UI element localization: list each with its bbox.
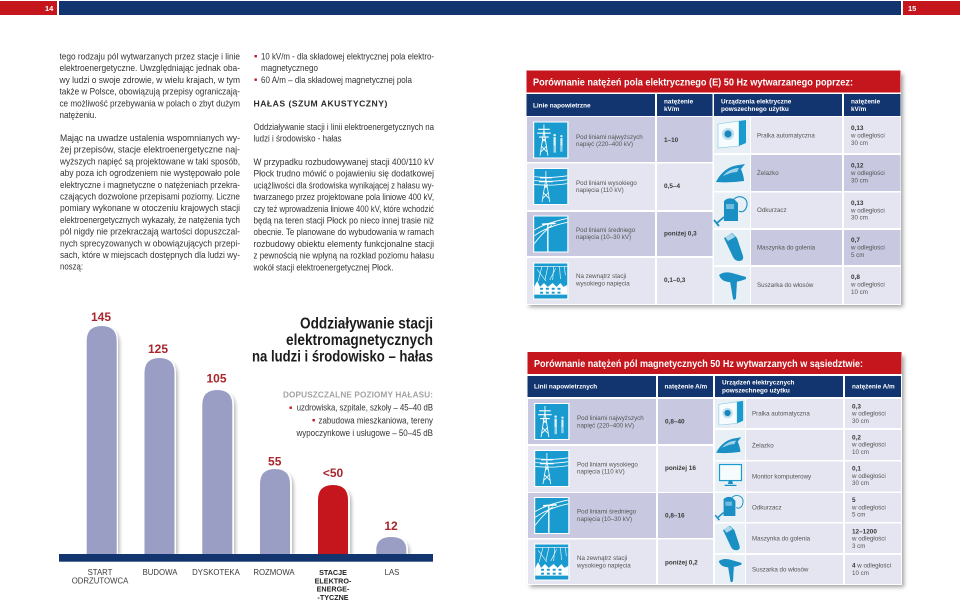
table header row: natężenie A/m	[852, 384, 895, 390]
text block: intro paragraph: ce możliwość przebywania w polach o zbyt dużym	[60, 98, 240, 110]
bar: budowa 125	[144, 342, 178, 555]
text block: noise paragraph: W przypadku rozbudowywanej stacji 400/110 kV	[254, 157, 435, 168]
row: washing machine: 30 cm	[852, 418, 869, 425]
row: shaver: 12–1200	[852, 528, 877, 535]
row: outside station: Na zewnątrz stacji	[577, 555, 627, 562]
table header row	[526, 94, 900, 116]
row: vacuum cleaner: 30 cm	[851, 214, 868, 222]
table header row: kV/m	[851, 106, 867, 113]
table header row: kV/m	[664, 106, 680, 113]
category labels: ENERGE-	[317, 585, 350, 594]
text block: noise paragraph: będą na teren stacji Płock po nieco innej trasie niż	[254, 216, 434, 226]
title: noise impact: elektromagnetycznych	[286, 332, 433, 349]
row: highest voltage lines: 1–10	[664, 137, 679, 144]
text block: noise paragraph: twarzanego przez projektowane pola liniowe 400 kV,	[254, 192, 434, 203]
header bar: page 14	[0, 1, 480, 15]
row: washing machine: w odległości	[851, 410, 886, 418]
bar: stacje 50	[318, 466, 352, 555]
row: high voltage lines: napięcia (110 kV)	[577, 469, 625, 476]
row: shaver	[714, 230, 900, 265]
bullet list: limit values: 10 kV/m - dla składowej elektrycznej pola elektro-	[261, 52, 434, 62]
row: iron: Żelazko	[752, 442, 774, 449]
text block: permitted noise levels: zabudowa mieszkaniowa, tereny	[318, 415, 433, 426]
text block: permitted noise levels	[283, 391, 433, 439]
row: outside station: wysokiego napięcia	[575, 281, 630, 288]
row: iron	[715, 430, 901, 460]
header bar: page 14: 14	[45, 4, 54, 13]
row: outside station: poniżej 0,2	[665, 559, 698, 566]
row: vacuum cleaner: w odległości	[850, 207, 885, 214]
text block: limits paragraph: aby poza ich ogrodzeniem nie występowało pole	[60, 168, 240, 179]
bar: las 12: 12	[384, 519, 398, 533]
row: hair dryer: 4 w odległości	[852, 563, 891, 570]
bar: start odrzutowca 145	[86, 310, 120, 555]
row: iron: 0,12	[851, 162, 864, 170]
row: highest voltage lines: napięć (220–400 kV)	[577, 423, 634, 430]
category labels	[72, 568, 399, 601]
row: washing machine: 0,3	[852, 403, 861, 410]
bullet list: limit values: 60 A/m – dla składowej magnetycznej pola	[261, 75, 413, 86]
row: iron: 0,2	[852, 434, 861, 441]
row: iron: 30 cm	[851, 178, 868, 184]
header bar: page 15	[480, 1, 960, 15]
bar: rozmowa 55: 55	[268, 454, 282, 468]
heading: noise: HAŁAS (SZUM AKUSTYCZNY)	[254, 98, 388, 108]
table title: magnetic field	[528, 352, 902, 374]
text block: intro paragraph	[59, 52, 240, 121]
row: washing machine: w odległości	[850, 132, 885, 140]
text block: noise paragraph: obecnie. Te planowane do wybudowania w ramach	[254, 227, 434, 238]
text block: permitted noise levels: DOPUSZCZALNE POZIOMY HAŁASU:	[283, 391, 433, 400]
row: iron: 10 cm	[852, 449, 869, 456]
text block: noise paragraph: rozbudowy obiektu elementy funkcjonalne stacji	[254, 239, 434, 250]
row: vacuum cleaner: 5 cm	[852, 512, 865, 518]
row: vacuum cleaner: Odkurzacz	[757, 207, 787, 214]
row: highest voltage lines: Pod liniami najwyższych	[577, 415, 644, 422]
table header row: Urządzeń elektrycznych	[722, 380, 795, 387]
row: medium voltage lines	[528, 493, 713, 538]
table header row	[528, 376, 901, 397]
row: outside station	[528, 540, 713, 584]
row: washing machine: 0,13	[851, 125, 864, 132]
row: iron: Żelazko	[757, 170, 779, 177]
row: high voltage lines: 0,5–4	[664, 183, 680, 190]
text block: limits paragraph: elektryczne i magnetyczne o natężeniach przekra-	[60, 180, 240, 191]
row: hair dryer: 10 cm	[851, 289, 868, 296]
text block: intro paragraph: natężeniu.	[60, 110, 96, 121]
row: shaver: 0,7	[851, 237, 860, 244]
row: shaver	[715, 524, 901, 553]
row: iron: w odległości	[851, 442, 886, 449]
text block: noise subtitle: Oddziaływanie stacji i linii elektroenergetycznych na	[254, 122, 435, 133]
text block: noise paragraph: czy też wprowadzenia liniowe 400 kV, które wchodzić	[254, 204, 434, 215]
category labels: ROZMOWA	[253, 568, 295, 577]
row: high voltage lines	[528, 446, 713, 492]
table header row: powszechnego użytku	[721, 106, 789, 113]
category labels: ODRZUTOWCA	[72, 576, 129, 586]
table header row: Linie napowietrzne	[533, 102, 591, 110]
bullet list: limit values: magnetycznego	[261, 63, 318, 74]
row: vacuum cleaner	[715, 493, 901, 522]
row: medium voltage lines	[527, 212, 712, 256]
text block: intro paragraph: także w Polsce, obowiązują przepisy ograniczają-	[60, 87, 240, 98]
category labels: DYSKOTEKA	[192, 568, 241, 577]
row: washing machine: 30 cm	[851, 140, 868, 147]
row: high voltage lines	[527, 164, 712, 210]
text block: intro paragraph: tego rodzaju pól wytwarzanych przez stacje i linie	[60, 52, 240, 62]
row: medium voltage lines: 0,8–16	[665, 512, 685, 519]
row: highest voltage lines	[527, 117, 712, 162]
bar: budowa 125: 125	[148, 342, 168, 356]
row: shaver: w odległości	[850, 244, 885, 252]
bullet list: limit values	[254, 52, 434, 86]
table header row: natężenie A/m	[664, 384, 708, 390]
row: washing machine	[714, 117, 900, 153]
title: noise impact	[252, 315, 433, 366]
row: hair dryer: 0,8	[851, 274, 860, 281]
row: washing machine: Pralka automatyczna	[752, 411, 810, 418]
text block: noise paragraph: wokół stacji elektroenergetycznej Płock.	[253, 262, 394, 273]
text block: limits paragraph: pomiary wykonane w otoczeniu krajowych stacji	[60, 203, 240, 214]
text block: limits paragraph: nych sprecyzowanych w obowiązujących przepi-	[60, 238, 240, 249]
text block: noise subtitle: ludzi i środowisko - hałas	[254, 134, 342, 145]
table title: magnetic field: Porównanie natężeń pól magnetycznych 50 Hz wytwarzanych w sąsiedztwie:	[534, 359, 863, 370]
title: noise impact: Oddziaływanie stacji	[300, 315, 433, 332]
table title: electric field: Porównanie natężeń pola elektrycznego (E) 50 Hz wytwarzanego poprzez:	[533, 78, 853, 88]
row: computer monitor	[715, 462, 901, 492]
text block: limits paragraph: pól nigdy nie przekraczają wartości dopuszczal-	[60, 227, 240, 238]
row: high voltage lines: Pod liniami wysokiego	[576, 180, 637, 187]
text block: limits paragraph: wyższych napięć są projektowane w taki sposób,	[59, 156, 240, 167]
table title: electric field	[526, 70, 900, 92]
row: high voltage lines: napięcia (110 kV)	[576, 187, 624, 194]
table header row: natężenie	[664, 98, 694, 106]
row: highest voltage lines: Pod liniami najwyższych	[576, 134, 643, 141]
text block: noise paragraph	[253, 157, 435, 273]
bar chart: noise levels	[59, 310, 433, 601]
table header row: natężenie	[851, 98, 881, 106]
table header row: Linii napowietrznych	[534, 384, 597, 390]
text block: limits paragraph: czających dozwolone przepisami poziomy. Liczne	[60, 192, 240, 202]
row: washing machine: Pralka automatyczna	[757, 132, 815, 140]
row: vacuum cleaner: 5	[852, 497, 856, 504]
bar: rozmowa 55	[260, 454, 294, 555]
row: hair dryer: Suszarka do włosów	[757, 282, 814, 289]
text block: limits paragraph: noszą:	[60, 262, 83, 273]
text block: permitted noise levels: uzdrowiska, szpitale, szkoły – 45–40 dB	[297, 403, 433, 414]
row: computer monitor: 30 cm	[852, 480, 869, 487]
row: high voltage lines: poniżej 16	[665, 465, 696, 472]
bar: dyskoteka 105: 105	[206, 372, 227, 386]
table header row: Urządzenia elektryczne	[721, 98, 792, 106]
category labels: STACJE	[319, 568, 347, 577]
row: highest voltage lines: 0,8–40	[665, 418, 685, 425]
text block: noise paragraph: z pewnością nie wpłyną na rozkład poziomu hałasu	[254, 251, 434, 262]
text block: noise paragraph: Płock trudno mówić o pojawieniu się dodatkowej	[254, 169, 434, 180]
text block: limits paragraph	[59, 133, 240, 273]
row: hair dryer: 10 cm	[852, 570, 869, 577]
title: noise impact: na ludzi i środowisko – hałas	[252, 349, 433, 366]
panel: magnetic field table	[527, 352, 904, 587]
panel: electric field table	[526, 70, 903, 307]
bar: dyskoteka 105	[202, 372, 236, 555]
row: vacuum cleaner: w odległości	[851, 504, 886, 511]
row: vacuum cleaner	[714, 192, 900, 228]
text block: limits paragraph: żej przepisów, stacje elektroenergetyczne naj-	[60, 145, 240, 156]
row: high voltage lines: Pod liniami wysokiego	[577, 462, 638, 469]
category labels: LAS	[385, 568, 399, 577]
row: shaver: Maszynka do golenia	[757, 244, 816, 252]
row: vacuum cleaner: Odkurzacz	[752, 504, 782, 511]
text block: limits paragraph: Mając na uwadze ustalenia wspomnianych wy-	[60, 133, 240, 144]
row: medium voltage lines: Pod liniami średniego	[577, 508, 637, 515]
row: medium voltage lines: napięcia (10–30 kV)	[576, 234, 631, 241]
row: hair dryer: Suszarka do włosów	[752, 567, 809, 574]
text block: noise subtitle	[254, 122, 435, 145]
text block: noise paragraph: uciążliwości dla środowiska wynikającej z hałasu wy-	[254, 180, 434, 191]
category labels: ELEKTRO-	[315, 576, 352, 586]
row: hair dryer	[714, 267, 900, 304]
text block: limits paragraph: sach, które w miejscach dostępnych dla ludzi wy-	[60, 250, 240, 261]
bar: stacje 50: <50	[323, 466, 344, 480]
row: highest voltage lines	[528, 399, 713, 444]
row: iron: w odległości	[850, 170, 885, 177]
row: shaver: Maszynka do golenia	[752, 536, 811, 543]
row: washing machine	[715, 399, 901, 428]
row: shaver: 3 cm	[852, 543, 865, 550]
bar: las 12	[376, 519, 410, 555]
text block: intro paragraph: wy ludzi o swoje zdrowie, w wielu krajach, w tym	[59, 75, 240, 86]
row: computer monitor: Monitor komputerowy	[752, 473, 812, 480]
row: outside station: 0,1–0,3	[664, 277, 686, 284]
row: computer monitor: 0,1	[852, 466, 861, 473]
row: medium voltage lines: poniżej 0,3	[664, 231, 697, 238]
row: computer monitor: w odległości	[851, 473, 886, 480]
row: medium voltage lines: napięcia (10–30 kV)	[577, 516, 632, 523]
text block: limits paragraph: elektroenergetycznych wykazały, że natężenia tych	[60, 215, 240, 226]
row: highest voltage lines: napięć (220–400 kV)	[576, 141, 633, 148]
bar: start odrzutowca 145: 145	[91, 310, 111, 324]
row: iron	[714, 155, 900, 191]
row: hair dryer: w odległości	[850, 282, 885, 288]
text block: permitted noise levels: wypoczynkowe i usługowe – 50–45 dB	[296, 428, 433, 439]
row: outside station: Na zewnątrz stacji	[576, 273, 626, 280]
row: vacuum cleaner: 0,13	[851, 200, 864, 207]
table header row: powszechnego użytku	[722, 388, 790, 394]
row: outside station: wysokiego napięcia	[576, 562, 631, 569]
row: shaver: 5 cm	[851, 252, 864, 259]
row: medium voltage lines: Pod liniami średniego	[576, 227, 636, 234]
header bar: page 15: 15	[908, 4, 916, 13]
row: hair dryer	[715, 555, 901, 584]
category labels: BUDOWA	[143, 568, 178, 577]
chart baseline	[59, 554, 433, 562]
row: shaver: w odległości	[851, 536, 886, 542]
category labels: START	[88, 568, 113, 577]
text block: intro paragraph: elektroenergetyczne. Uwzględniając jednak oba-	[60, 63, 240, 74]
row: outside station	[527, 258, 712, 304]
